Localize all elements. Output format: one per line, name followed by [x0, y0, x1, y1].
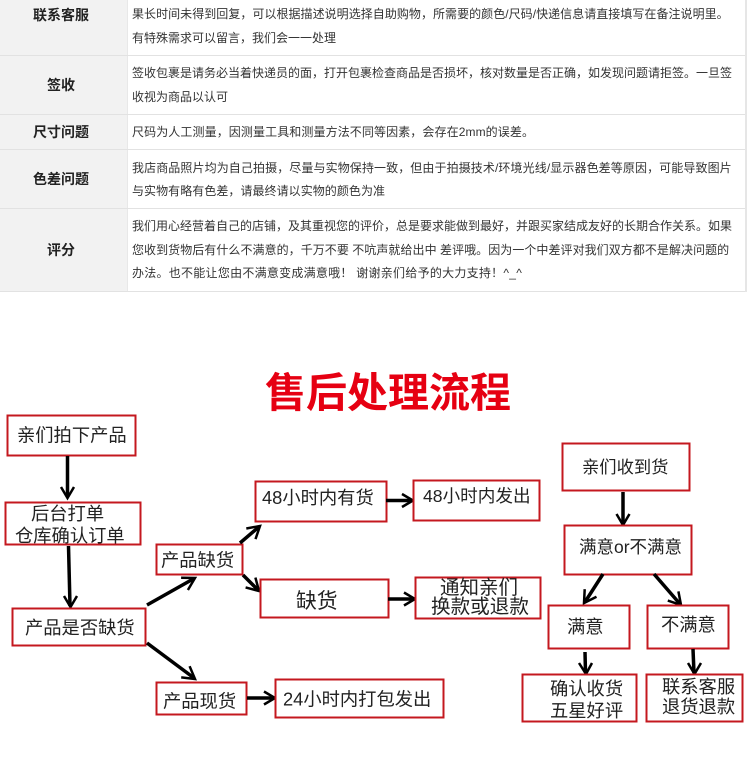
- table row: customer service: [0, 0, 745, 56]
- table row: signing for delivery: 签收包裹是请务必当着快递员的面，打开包裹检查商品是否损坏，核对数量是否正确，如发现问题请拒签。一旦签: [132, 66, 732, 80]
- arrow: satisfied to confirm: [579, 652, 592, 674]
- box: ship in 24 hours: [276, 680, 444, 718]
- box: notify customer: 通知亲们: [440, 577, 518, 599]
- title: 售后处理流程: [265, 370, 511, 416]
- box: confirm receipt and five-star review: 确认收货: [550, 678, 623, 699]
- box: no stock: [260, 580, 388, 618]
- arrow: received to decision: [616, 492, 630, 525]
- row label: [0, 56, 128, 114]
- box: back office confirms order: [6, 502, 140, 546]
- table row: ratings: [0, 209, 745, 292]
- box: ship within 48 hours: [414, 480, 540, 520]
- box: goods received: [562, 444, 690, 490]
- table row: colour difference: [0, 150, 745, 209]
- arrow: to in stock: [147, 643, 195, 679]
- row text: [132, 161, 732, 198]
- box: available within 48 hours: [256, 482, 386, 522]
- box: stock check: [12, 608, 146, 646]
- table row: signing for delivery: [0, 56, 745, 115]
- table row: ratings: 您收到货物后有什么不满意的，千万不要 不吭声就给出中 差评哦。因为一个中差评对我们双方都不是解决问题的: [132, 243, 729, 257]
- arrow: confirm to stock check: [64, 546, 77, 607]
- box: no stock: 缺货: [296, 590, 338, 613]
- row text: [132, 219, 732, 280]
- row text: [132, 7, 729, 45]
- row label: [0, 115, 128, 149]
- table row: signing for delivery: 收视为商品以认可: [132, 90, 228, 104]
- arrow: in stock to ship in 24h: [247, 692, 275, 704]
- box: goods received: 亲们收到货: [582, 457, 668, 477]
- box: notify customer: [416, 577, 540, 618]
- arrow: to out of stock: [147, 578, 195, 605]
- arrow: to available within 48h: [240, 526, 260, 543]
- box: in stock: [156, 682, 246, 714]
- arrow: to satisfied: [584, 574, 603, 603]
- row label: 签收: [47, 77, 75, 93]
- box: back office confirms order: 后台打单: [31, 503, 104, 524]
- box: contact service for refund: 退货退款: [662, 696, 735, 717]
- table row: colour difference: 与实物有略有色差，请最终请以实物的颜色为准: [132, 184, 385, 198]
- panel: after-sales notes table: [0, 0, 747, 292]
- table row: ratings: 我们用心经营着自己的店铺，及其重视您的评价，总是要求能做到最好，并跟买家结成友好的长期合作关系。如果: [132, 219, 732, 233]
- box: order placed: [8, 416, 136, 456]
- box: stock check: 产品是否缺货: [25, 617, 135, 638]
- box: in stock: 产品现货: [163, 690, 236, 712]
- table row: colour difference: 我店商品照片均为自己拍摄，尽量与实物保持一致，但由于拍摄技术/环境光线/显示器色差等原因，可能导致图片: [132, 161, 732, 175]
- box: confirm receipt and five-star review: [522, 674, 636, 722]
- box: back office confirms order: 仓库确认订单: [15, 525, 125, 546]
- box: not satisfied: [648, 606, 728, 648]
- table row: size issues: [0, 115, 745, 150]
- box: contact service for refund: 联系客服: [662, 676, 735, 697]
- row label: [0, 150, 128, 208]
- row label: 色差问题: [33, 171, 89, 187]
- box: satisfied or not: [564, 526, 692, 574]
- row text: [132, 66, 732, 104]
- box: not satisfied: 不满意: [661, 614, 716, 635]
- table row: customer service: 果长时间未得到回复，可以根据描述说明选择自助购物，所需要的颜色/尺码/快递信息请直接填写在备注说明里。: [132, 7, 729, 21]
- arrow: order to confirm: [61, 456, 74, 498]
- row label: 尺寸问题: [33, 124, 89, 140]
- table row: size issues: 尺码为人工测量，因测量工具和测量方法不同等因素，会存在2mm的误差。: [132, 125, 534, 139]
- box: confirm receipt and five-star review: 五星好评: [550, 700, 623, 721]
- box: out of stock: [156, 544, 242, 574]
- box: out of stock: 产品缺货: [161, 550, 234, 570]
- box: available within 48 hours: 48小时内有货: [262, 487, 374, 508]
- box: contact service for refund: [646, 674, 742, 722]
- box: ship in 24 hours: 24小时内打包发出: [283, 688, 431, 710]
- box: satisfied or not: 满意or不满意: [579, 537, 682, 557]
- arrow: to no stock: [243, 575, 259, 591]
- arrow: to not satisfied: [654, 574, 681, 605]
- table row: ratings: 办法。也不能让您由不满意变成满意哦！ 谢谢亲们给予的大力支持！^_^: [132, 266, 522, 280]
- row label: [0, 0, 128, 55]
- arrow: to notify customer: [388, 592, 415, 606]
- table row: customer service: 有特殊需求可以留言，我们会一一处理: [132, 31, 336, 45]
- arrow: to ship in 48h: [386, 494, 413, 507]
- row label: 评分: [47, 242, 75, 258]
- box: notify customer: 换款或退款: [431, 596, 529, 618]
- row label: 联系客服: [33, 6, 89, 22]
- box: satisfied: [548, 606, 630, 648]
- arrow: not satisfied to contact: [688, 649, 701, 674]
- box: satisfied: 满意: [567, 616, 604, 637]
- box: order placed: 亲们拍下产品: [17, 424, 127, 446]
- row label: [0, 209, 128, 291]
- box: ship within 48 hours: 48小时内发出: [423, 486, 531, 506]
